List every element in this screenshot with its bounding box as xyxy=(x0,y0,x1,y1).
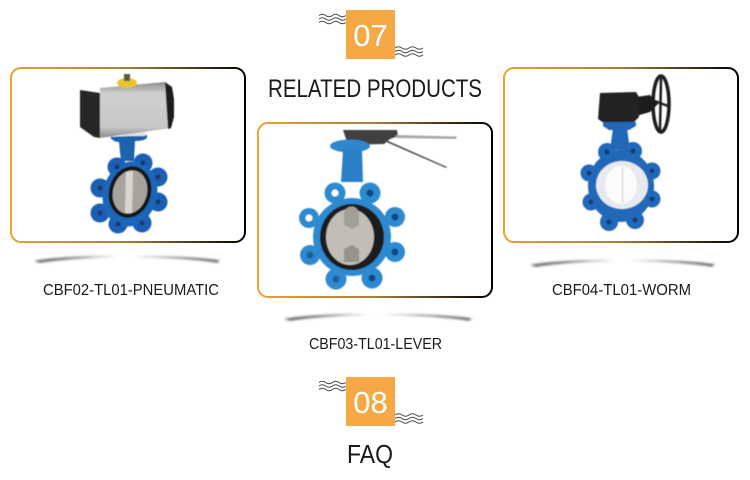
panel: worm gear valve xyxy=(504,68,738,242)
label: pneumatic: CBF02-TL01-PNEUMATIC xyxy=(43,282,219,299)
panel: lever valve xyxy=(258,123,492,297)
heading: FAQ: FAQ xyxy=(347,439,393,469)
section badge 08: 08 xyxy=(353,385,388,420)
section badge 07 xyxy=(319,10,423,59)
icon: lever butterfly valve xyxy=(299,130,457,290)
icon: pneumatic butterfly valve xyxy=(80,74,174,234)
label: lever: CBF03-TL01-LEVER xyxy=(309,336,442,353)
heading: related products: RELATED PRODUCTS xyxy=(268,75,482,103)
label: worm: CBF04-TL01-WORM xyxy=(552,282,691,299)
icon: worm gear butterfly valve xyxy=(580,76,669,231)
shadow: lever xyxy=(284,314,472,320)
panel: pneumatic valve xyxy=(11,68,245,242)
section badge 07: 07 xyxy=(353,18,388,53)
shadow: pneumatic xyxy=(34,256,220,262)
section badge 08 xyxy=(319,377,423,426)
shadow: worm xyxy=(530,260,715,266)
